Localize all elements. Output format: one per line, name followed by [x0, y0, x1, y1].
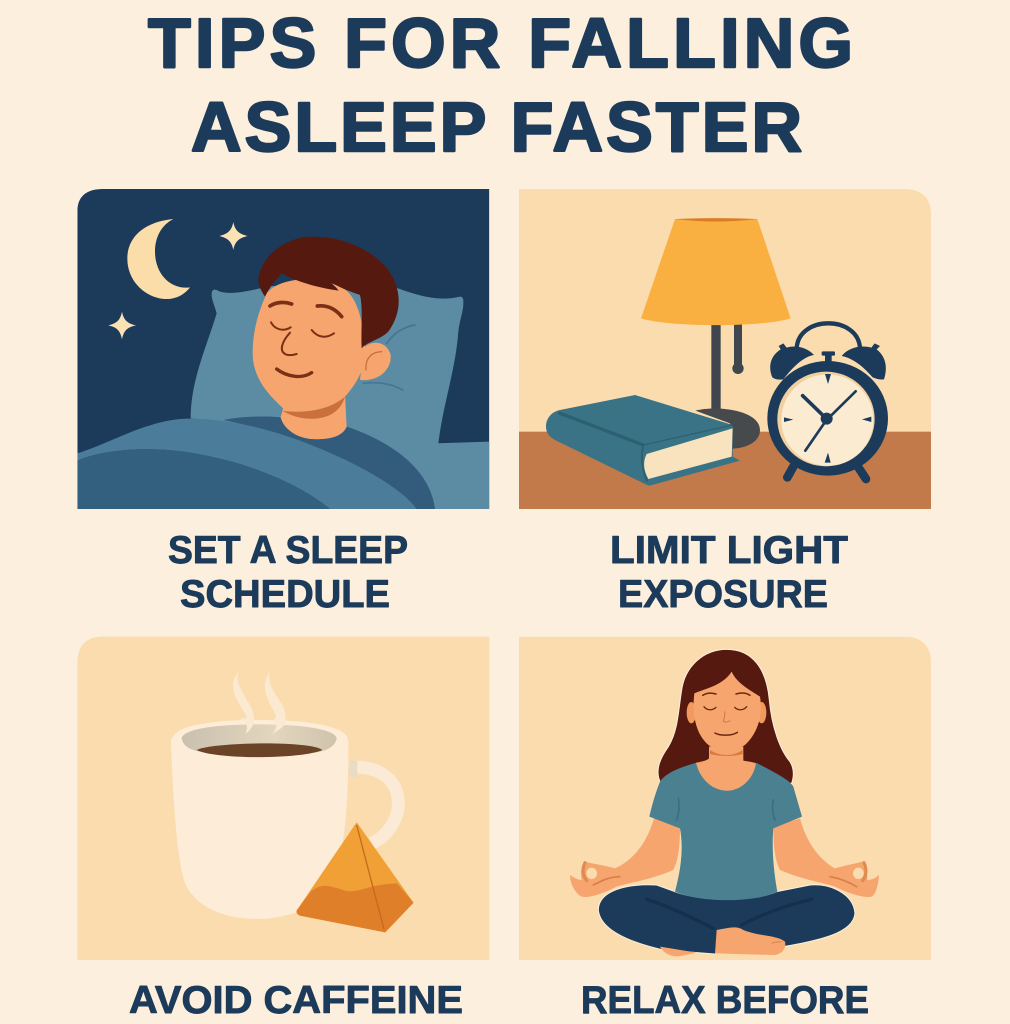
label: limit light exposure: EXPOSURE [618, 573, 828, 616]
neck [280, 396, 347, 440]
pillow creases [363, 325, 415, 390]
label: set a sleep schedule [168, 529, 408, 616]
icon: book [546, 395, 740, 486]
face [694, 672, 761, 751]
title: TIPS FOR FALLING [148, 4, 853, 82]
icon: alarm clock [767, 323, 888, 479]
panel: limit light exposure [519, 189, 931, 509]
hair back [658, 649, 793, 783]
arms and hands [570, 818, 879, 897]
bed right [406, 442, 490, 509]
label: set a sleep schedule: SCHEDULE [180, 573, 390, 616]
label: relax before: RELAX BEFORE [581, 979, 869, 1022]
label: avoid caffeine: AVOID CAFFEINE [129, 979, 463, 1022]
panel: set a sleep schedule [77, 189, 489, 509]
icon: crescent moon [127, 219, 190, 299]
coffee in mug [182, 724, 337, 752]
shirt [223, 417, 435, 509]
title [148, 4, 853, 166]
icon: mug handle [349, 767, 398, 843]
eyebrows, eyes, nose, mouth [270, 302, 342, 376]
table [519, 432, 931, 509]
shirt [649, 763, 802, 900]
pillow [190, 286, 464, 444]
neck shadow [282, 397, 345, 419]
title: ASLEEP FASTER [191, 88, 802, 166]
ears [687, 702, 696, 723]
panel: avoid caffeine [77, 637, 489, 960]
face [253, 279, 365, 412]
icon: mug [171, 720, 348, 919]
legs [598, 885, 855, 954]
label: limit light exposure: LIMIT LIGHT [610, 529, 848, 572]
icon: steam [233, 672, 285, 734]
icon: star upper [219, 222, 248, 250]
hair [258, 237, 399, 348]
panel: relax before [519, 637, 931, 960]
blanket lower fold [77, 449, 330, 509]
ear [360, 343, 391, 380]
icon: lamp [641, 218, 791, 449]
icon: tea bag [297, 823, 413, 932]
label: limit light exposure [610, 529, 848, 616]
icon: star lower [108, 312, 136, 339]
blanket top fold [77, 419, 417, 509]
feet [660, 947, 697, 956]
facial features [703, 693, 750, 735]
label: set a sleep schedule: SET A SLEEP [168, 529, 408, 572]
neck [696, 747, 756, 791]
